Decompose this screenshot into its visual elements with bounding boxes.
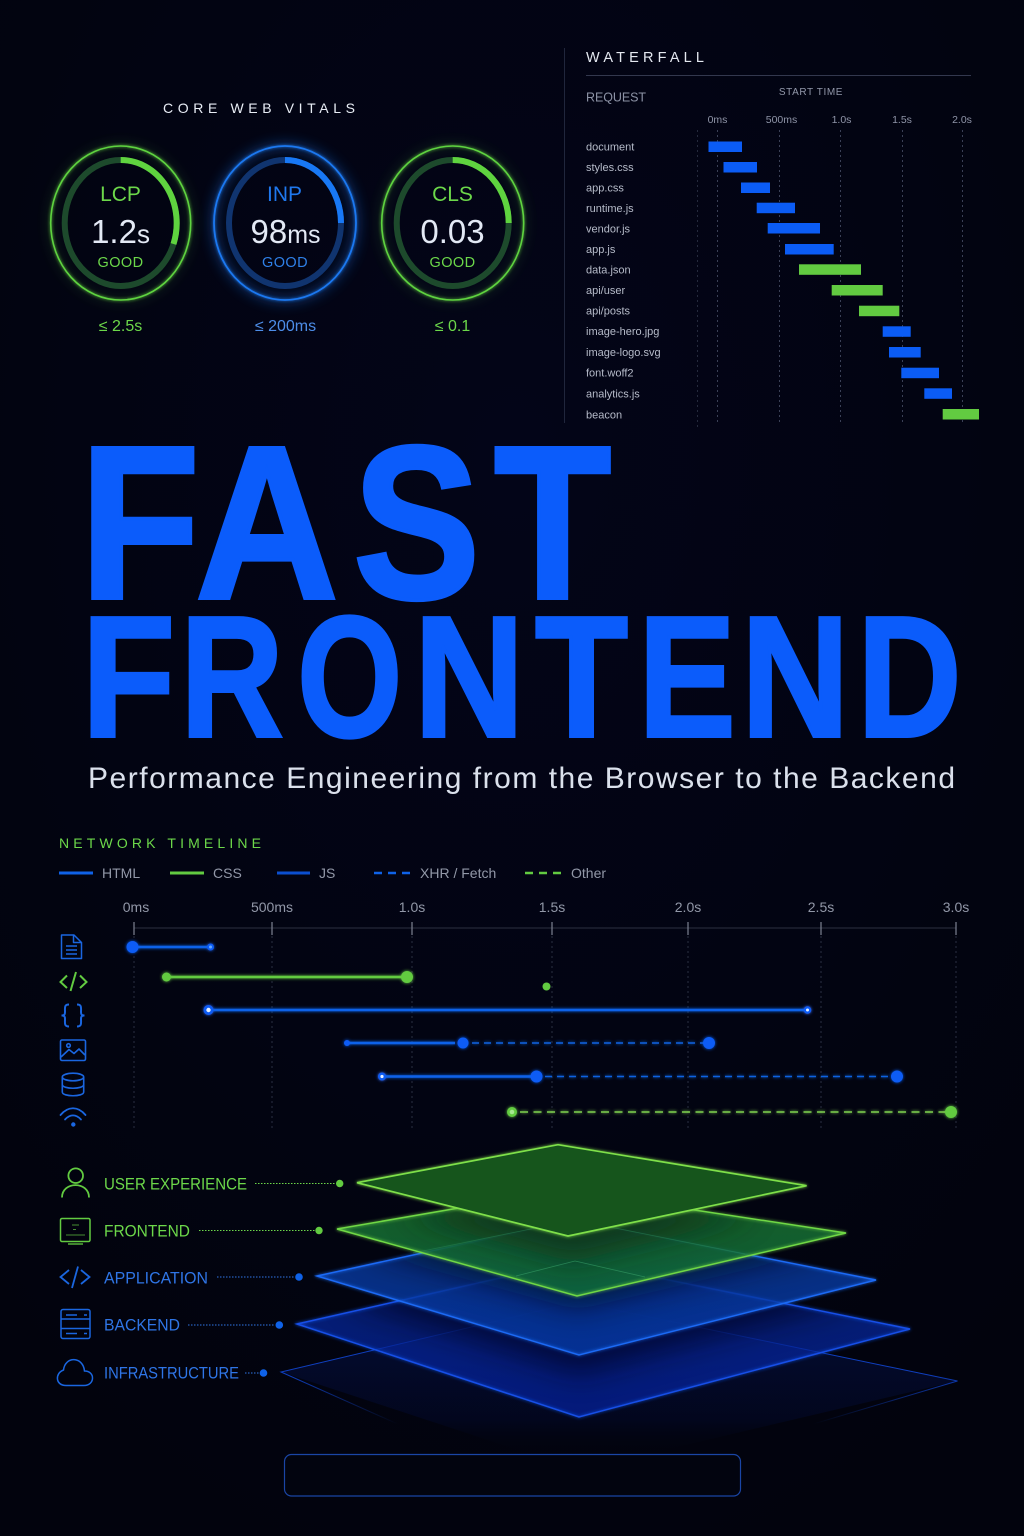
waterfall time axis: 1.5s — [892, 114, 912, 126]
icon: user — [62, 1168, 89, 1198]
gauge: LCP: LCP — [100, 183, 141, 206]
gauge: INP: 98ms — [250, 213, 321, 250]
icon: image — [60, 1040, 86, 1060]
layer: backend plane — [294, 1276, 912, 1420]
title: F — [82, 582, 175, 773]
timeline row: document — [126, 941, 214, 953]
waterfall time axis — [708, 114, 972, 126]
title: A — [195, 402, 338, 645]
timeline row: data — [378, 1070, 903, 1082]
waterfall bars — [708, 142, 979, 420]
layer row: infrastructure: INFRASTRUCTURE — [104, 1364, 239, 1382]
legend: CSS — [213, 865, 242, 881]
gauge: CLS: ≤ 0.1 — [435, 318, 470, 335]
icon: document — [62, 935, 82, 958]
layer stack — [280, 1142, 958, 1428]
legend: HTML — [102, 865, 140, 881]
gauge: LCP — [51, 146, 191, 335]
timeline axis: 2.0s — [675, 899, 701, 915]
gauge: INP: GOOD — [262, 255, 308, 271]
timeline point: green marker — [542, 982, 550, 990]
title: F — [80, 400, 200, 644]
subtitle: Performance Engineering from the Browser to the Backend — [88, 762, 955, 795]
layer row: backend — [61, 1310, 283, 1338]
icon: monitor — [60, 1218, 90, 1244]
icon: code — [60, 972, 86, 991]
gauge: INP — [214, 146, 356, 335]
waterfall request names: beacon — [586, 410, 622, 422]
timeline axis: 1.0s — [399, 899, 425, 915]
title: N — [414, 582, 524, 773]
title: T — [535, 581, 628, 773]
layer row: frontend: FRONTEND — [104, 1222, 190, 1240]
title: N — [741, 581, 849, 774]
waterfall request names: document — [586, 142, 634, 154]
icon: database — [62, 1073, 84, 1096]
title — [80, 400, 961, 774]
gauge: LCP: ≤ 2.5s — [99, 318, 142, 335]
waterfall request names: vendor.js — [586, 224, 631, 236]
gauge: CLS: 0.03 — [420, 213, 485, 250]
layer row: backend: BACKEND — [104, 1316, 180, 1334]
title: S — [353, 402, 480, 645]
icon: cloud — [57, 1360, 93, 1386]
waterfall request names: image-logo.svg — [586, 347, 661, 359]
timeline axis: 3.0s — [943, 899, 969, 915]
timeline axis: 0ms — [123, 899, 149, 915]
timeline axis — [123, 899, 969, 1128]
panel: waterfall: START TIME — [779, 87, 843, 98]
waterfall request names: image-hero.jpg — [586, 326, 659, 338]
layer row: user experience: USER EXPERIENCE — [104, 1176, 247, 1194]
timeline axis: 500ms — [251, 899, 293, 915]
timeline row: stylesheet — [162, 971, 413, 983]
waterfall request names: api/posts — [586, 306, 631, 318]
layer row: frontend — [60, 1218, 323, 1244]
timeline axis: 2.5s — [808, 899, 834, 915]
waterfall time axis: 1.0s — [832, 114, 851, 126]
empty footer box — [284, 1454, 740, 1496]
waterfall request names — [586, 142, 661, 422]
title: O — [297, 580, 402, 773]
waterfall request names: data.json — [586, 264, 631, 276]
layer row: infrastructure — [57, 1360, 267, 1386]
title: E — [638, 581, 736, 773]
icon: code brackets — [60, 1266, 90, 1288]
waterfall time axis: 2.0s — [952, 114, 972, 126]
timeline axis: 1.5s — [539, 899, 565, 915]
legend — [59, 865, 606, 881]
panel: waterfall — [564, 48, 979, 428]
layer row: application: APPLICATION — [104, 1270, 208, 1288]
icon: braces — [62, 1004, 84, 1026]
waterfall request names: api/user — [586, 285, 625, 297]
title: D — [858, 581, 961, 773]
waterfall request names: app.js — [586, 244, 616, 256]
heading: network timeline: NETWORK TIMELINE — [59, 835, 261, 851]
legend: Other — [571, 865, 606, 881]
waterfall request names: styles.css — [586, 162, 634, 174]
timeline row: network — [507, 1106, 957, 1118]
legend: JS — [319, 865, 335, 881]
waterfall request names: font.woff2 — [586, 368, 634, 380]
timeline row: image — [344, 1037, 715, 1049]
layer: frontend plane — [335, 1206, 848, 1299]
layer row: user experience — [62, 1168, 343, 1198]
layer: user experience plane — [357, 1145, 807, 1236]
waterfall heading: WATERFALL — [586, 50, 704, 66]
title: T — [494, 401, 611, 645]
heading: core web vitals: CORE WEB VITALS — [163, 100, 355, 116]
gauge: CLS — [382, 146, 524, 335]
legend: XHR / Fetch — [420, 865, 496, 881]
gauge: CLS: CLS — [432, 183, 473, 206]
panel: waterfall: REQUEST — [586, 90, 646, 104]
layer row: application — [60, 1266, 303, 1288]
layer: infrastructure plane — [281, 1302, 958, 1470]
layer: application plane — [313, 1229, 878, 1358]
gauge: INP: INP — [267, 183, 302, 206]
icon: server — [61, 1310, 90, 1338]
gauge: LCP: GOOD — [98, 255, 143, 271]
gauge: CLS: GOOD — [430, 255, 475, 271]
title: R — [181, 581, 283, 773]
icon: wifi — [60, 1108, 86, 1127]
waterfall time axis: 500ms — [766, 114, 797, 126]
timeline row: script — [204, 1005, 811, 1015]
gauge: INP: ≤ 200ms — [255, 318, 316, 335]
gauge: LCP: 1.2s — [91, 213, 150, 250]
waterfall request names: app.css — [586, 182, 624, 194]
waterfall request names: analytics.js — [586, 388, 640, 400]
waterfall time axis: 0ms — [708, 114, 727, 126]
waterfall request names: runtime.js — [586, 203, 634, 215]
